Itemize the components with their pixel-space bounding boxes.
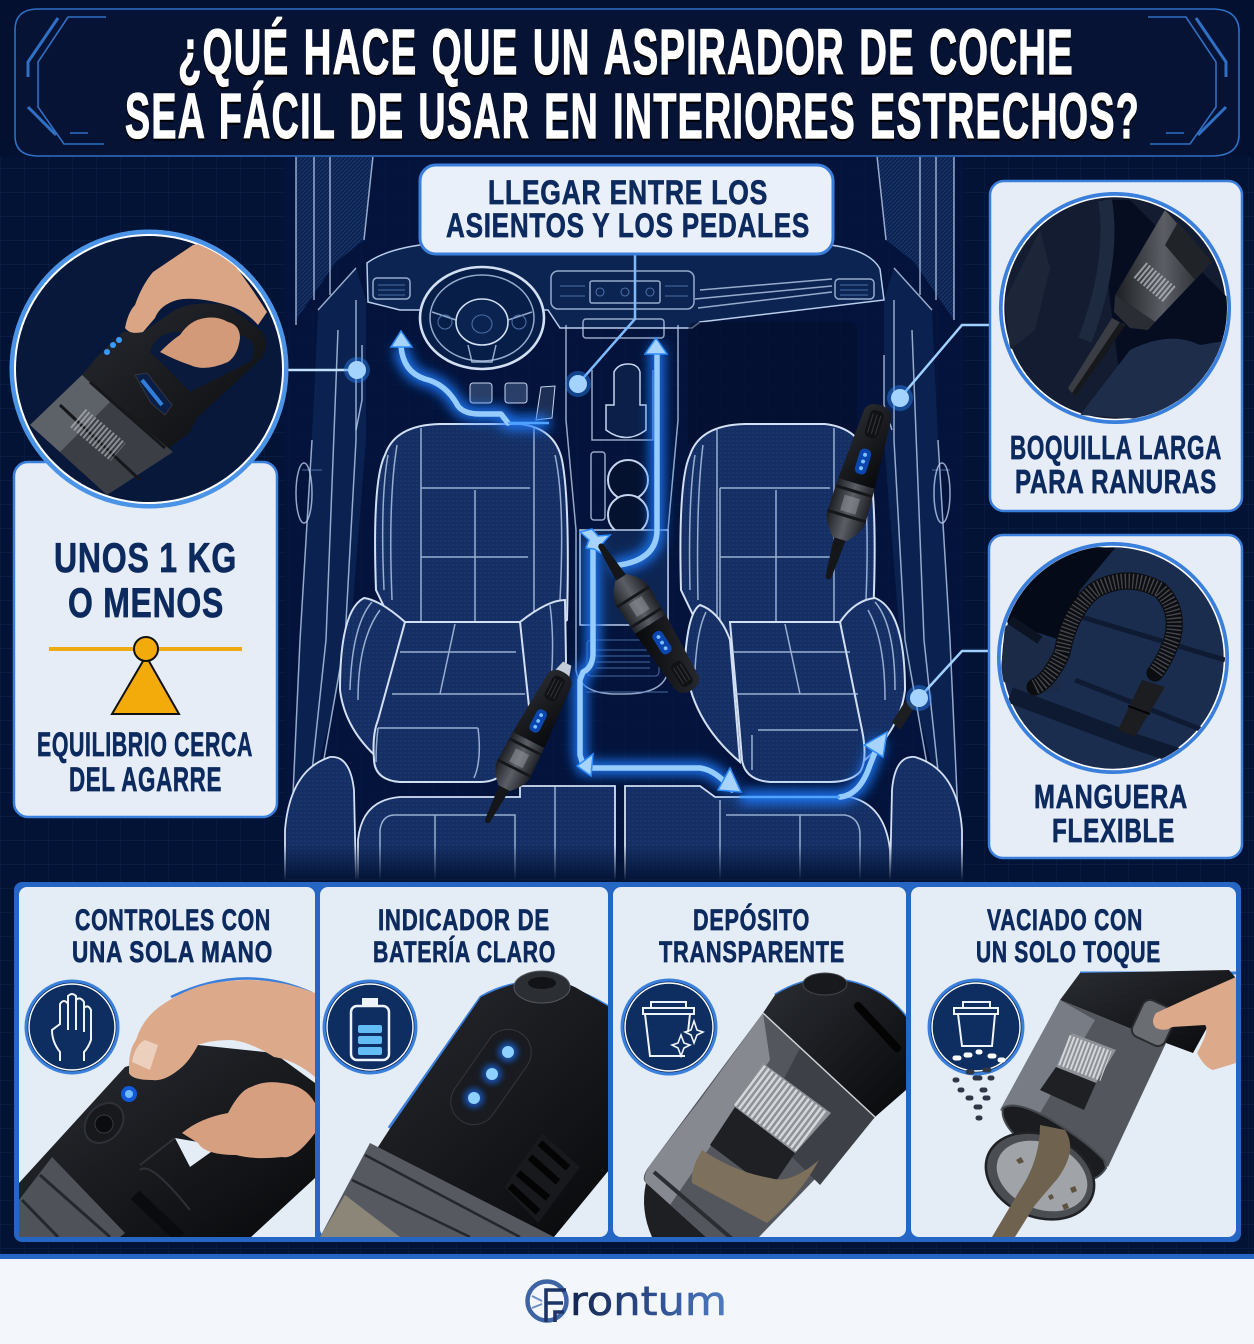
photo: hose in door pocket	[999, 544, 1227, 772]
fingers	[182, 1082, 315, 1158]
vent	[512, 1152, 580, 1222]
left front seat	[340, 424, 568, 782]
photo: LED indicator close-up	[320, 971, 609, 1237]
glowing route paths	[391, 331, 887, 797]
balance text: EQUILIBRIO CERCA	[37, 726, 253, 764]
photo: tank opening	[973, 970, 1236, 1237]
bottom feature strip	[14, 882, 1241, 1250]
tank shell	[644, 1013, 875, 1237]
vent	[135, 373, 172, 415]
heading: UN SOLO TOQUE	[976, 936, 1161, 969]
panel: one-touch emptying	[911, 887, 1236, 1237]
heading	[659, 903, 845, 969]
logo: Frontum: rontum	[570, 1279, 727, 1325]
tank	[320, 1143, 554, 1237]
finger	[1153, 977, 1236, 1070]
heading	[373, 904, 556, 969]
center console	[566, 325, 678, 694]
panel: weight and balance	[12, 232, 370, 817]
hose text	[1034, 778, 1188, 849]
icon: transparent bin	[622, 980, 716, 1074]
icon: balance scale	[49, 637, 242, 714]
hose text: MANGUERA	[1034, 778, 1188, 815]
balance text	[37, 726, 253, 799]
callout: reach between seats and pedals	[420, 165, 833, 397]
steering wheel	[420, 267, 544, 369]
weight text: O MENOS	[68, 579, 224, 626]
heading: VACIADO CON	[987, 904, 1143, 937]
panel: flexible hose	[906, 535, 1242, 858]
icon: battery	[324, 981, 416, 1073]
rim	[644, 1183, 706, 1237]
hand	[125, 244, 267, 333]
button	[1130, 999, 1173, 1048]
icon: hand	[26, 981, 118, 1073]
tank	[30, 375, 173, 495]
dark top	[763, 979, 906, 1117]
LED pill	[450, 1029, 532, 1125]
callout text: LLEGAR ENTRE LOS	[488, 174, 768, 212]
vacuum: right seat position	[809, 399, 899, 585]
callout text	[446, 174, 810, 245]
panel: transparent tank	[613, 887, 906, 1250]
connector line	[887, 325, 992, 411]
vacuum body	[82, 304, 266, 495]
weight text: UNOS 1 KG	[54, 534, 237, 581]
thumb and palm	[129, 980, 315, 1080]
lid	[973, 1117, 1107, 1235]
weight text	[54, 534, 237, 626]
car interior blueprint	[270, 156, 980, 881]
door and pillar lines	[283, 156, 963, 880]
heading	[976, 904, 1161, 969]
right front seat	[680, 424, 905, 782]
heading: DEPÓSITO	[693, 903, 810, 937]
photo: dust tank	[644, 973, 906, 1250]
photo: hand holding vacuum	[12, 232, 286, 506]
connector line	[906, 651, 992, 711]
photo: nozzle in seat gap	[1001, 194, 1230, 425]
falling dirt	[992, 1125, 1070, 1237]
handle hole	[150, 332, 254, 392]
panel: long crevice nozzle	[887, 181, 1242, 511]
hose tip	[892, 700, 917, 730]
vacuum: left seat position	[470, 655, 584, 831]
dashboard	[367, 245, 884, 447]
title	[125, 16, 1140, 152]
panel: one-hand controls	[19, 887, 315, 1237]
dark top	[1060, 970, 1235, 1053]
footer band	[0, 1254, 1254, 1344]
balance text: DEL AGARRE	[69, 761, 222, 799]
nozzle text	[1010, 429, 1222, 500]
heading: UNA SOLA MANO	[72, 936, 273, 969]
top knob	[514, 971, 570, 1003]
icon: bin emptying	[929, 980, 1023, 1118]
heading	[72, 904, 273, 969]
tank	[19, 1157, 125, 1237]
heading: INDICADOR DE	[378, 904, 550, 937]
tank	[1000, 1000, 1166, 1167]
filter core	[710, 1107, 795, 1180]
pedals	[470, 383, 555, 420]
heading: TRANSPARENTE	[659, 936, 845, 969]
photo: hand on vacuum	[19, 978, 315, 1237]
connector line	[565, 254, 635, 397]
header banner	[0, 0, 1254, 157]
LEDs	[104, 349, 110, 355]
hose text: FLEXIBLE	[1052, 812, 1175, 849]
header frame ornaments	[28, 17, 1226, 144]
dirt	[692, 1150, 819, 1223]
callout text: ASIENTOS Y LOS PEDALES	[446, 207, 810, 245]
heading: CONTROLES CON	[75, 904, 271, 937]
heading: BATERÍA CLARO	[373, 935, 556, 969]
open rim	[1003, 1106, 1106, 1180]
button and LED	[84, 1102, 124, 1144]
gap in handle	[175, 1138, 211, 1167]
connector line	[285, 357, 370, 383]
vacuum: center console position	[584, 534, 708, 700]
body and handle	[19, 1045, 315, 1237]
panel: battery indicator	[320, 887, 609, 1237]
rear seats	[270, 757, 980, 881]
